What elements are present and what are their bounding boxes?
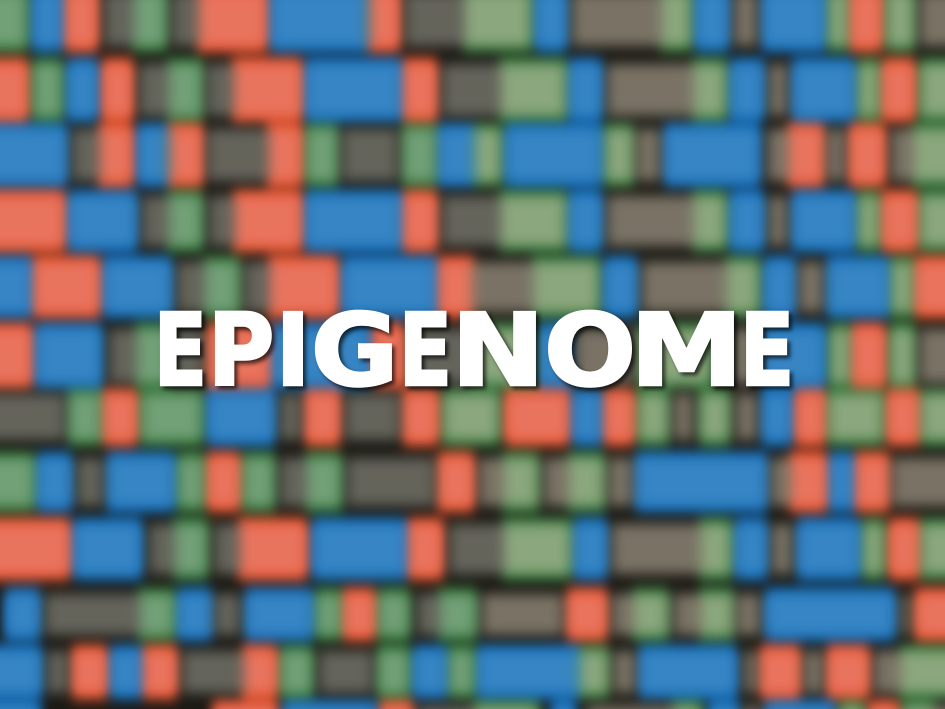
title: M: [630, 292, 743, 409]
title: E: [399, 292, 452, 409]
title: E: [740, 292, 794, 409]
title: N: [451, 292, 545, 409]
title: E: [154, 292, 207, 409]
title: O: [544, 292, 636, 409]
title: P: [208, 292, 274, 409]
title: G: [311, 292, 398, 409]
title: I: [276, 292, 310, 409]
